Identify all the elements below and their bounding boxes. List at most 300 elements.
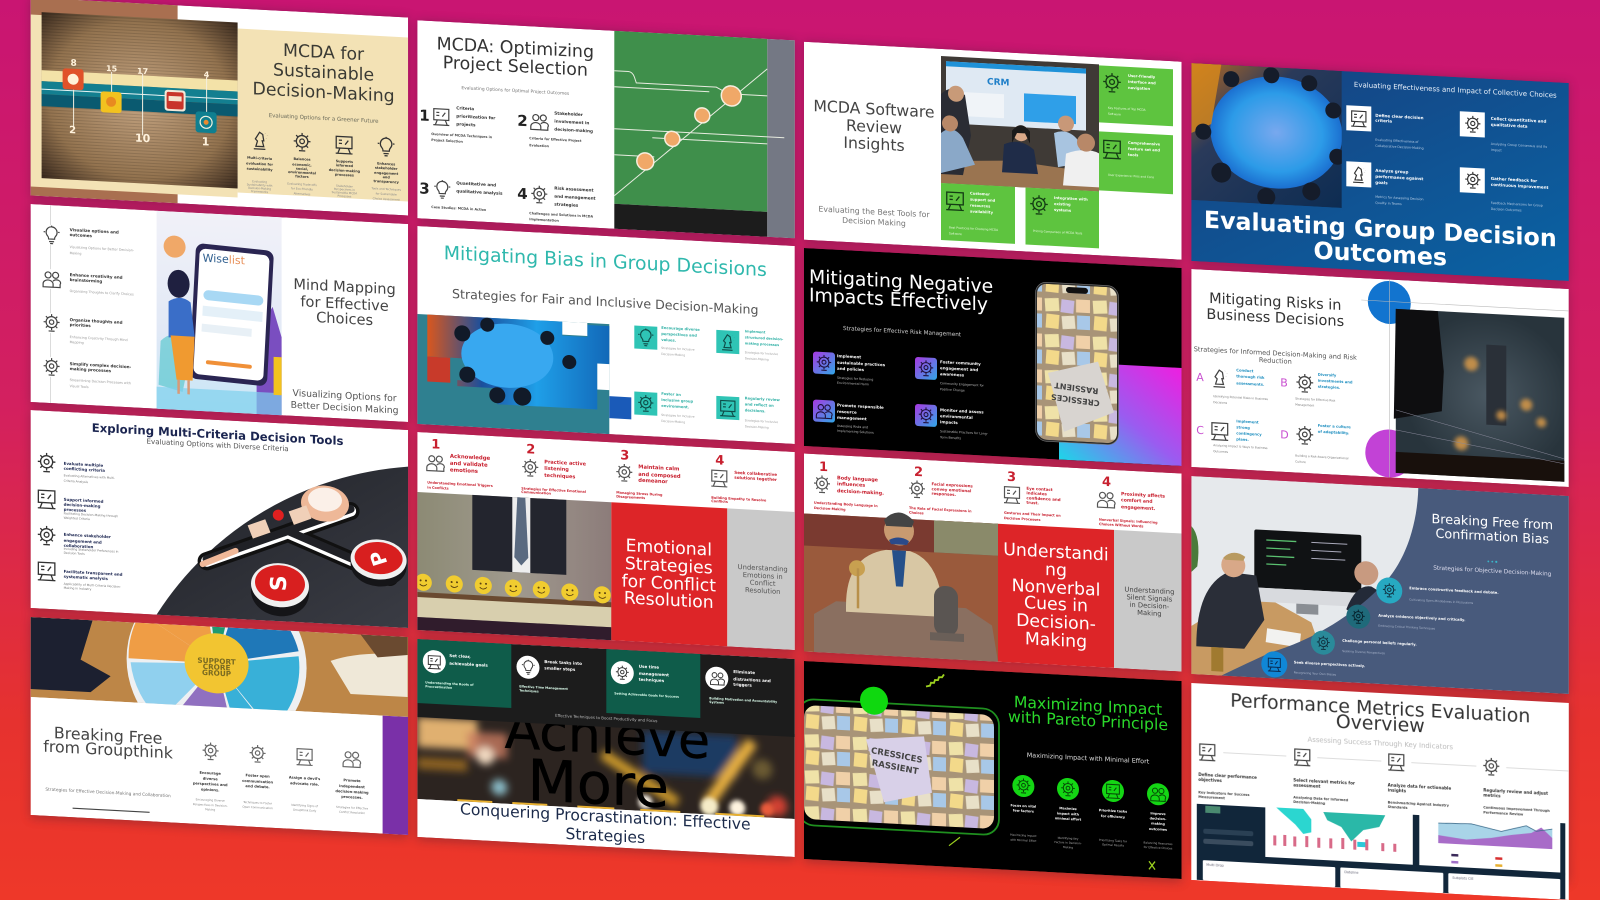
gradient block <box>1059 362 1182 466</box>
item: set goals <box>423 650 488 692</box>
photo: support wheel on floor: CRORE <box>203 661 230 672</box>
item 3: Eye contact <box>1026 485 1053 492</box>
photo: support wheel on floor: SUPPORT <box>197 655 236 666</box>
item: organize thoughts <box>42 313 128 347</box>
box: comprehensive feature set <box>1099 131 1173 194</box>
item: stakeholder engagement <box>370 136 401 202</box>
item: regularly review: decisions. <box>745 408 766 413</box>
item 3: trust. <box>1026 499 1039 505</box>
box: user-friendly interface: interface and <box>1128 80 1156 85</box>
item 1: Body language <box>837 475 879 483</box>
item: encourage diverse: Encourage diverse <box>661 326 700 332</box>
item: improve: making <box>1151 821 1165 826</box>
subtitle: Evaluating Effectiveness and Impact of Collective Choices <box>1354 81 1557 100</box>
item: collect data: Collect quantitative and <box>1491 115 1546 123</box>
item: break tasks: Techniques <box>519 688 539 693</box>
heading: Breaking Free <box>54 723 162 747</box>
item C: contingency <box>1236 431 1262 437</box>
heading: MCDA for <box>283 41 365 65</box>
heading: ng <box>1045 560 1067 581</box>
cross accent <box>1149 861 1155 870</box>
item: enhance stakeholder: engagement and <box>64 537 102 544</box>
box: integration: Pricing Comparison of MCDA Tools <box>1033 229 1083 235</box>
item: enhance creativity: Organizing Thoughts to Clarify Choices <box>70 289 134 296</box>
item 3: Maintain calm <box>638 464 679 472</box>
item: analyze performance: performance against <box>1375 173 1423 181</box>
item 2: Criteria for Effective Project <box>529 136 582 143</box>
item: gather feedback: Gather feedback for <box>1491 175 1537 183</box>
heading: Decision- <box>1016 611 1096 635</box>
item 1 <box>814 460 884 514</box>
item: regularly review <box>716 395 780 430</box>
item: evaluate conflicting criteria: Evaluating Alternatives with Multi- <box>64 473 115 480</box>
item: define objectives: Define clear performance <box>1198 771 1257 780</box>
item 1: 1 <box>431 437 440 453</box>
dashboard <box>1197 803 1565 899</box>
item: regularly review: Continuous Improvement Through <box>1483 805 1550 813</box>
item: eliminate distractions: Eliminate <box>733 669 755 675</box>
item: support informed: decision-making <box>64 501 101 508</box>
illustration: dark disc with buttons: S <box>267 575 292 592</box>
item 3: Decision Processes <box>1004 516 1041 522</box>
item: break tasks: smaller steps <box>544 665 576 672</box>
item: implement structured <box>716 328 784 362</box>
heading: Confirmation Bias <box>1435 526 1549 547</box>
item: sustainable practices <box>813 351 886 387</box>
item: gather feedback <box>1460 167 1549 214</box>
heading: MCDA Software <box>813 96 935 121</box>
item: balances factors: Evaluating Trade-offs <box>287 182 317 187</box>
item A <box>1196 366 1268 407</box>
item: evaluate conflicting criteria: conflicting criteria <box>64 465 105 472</box>
item 2: Communication <box>521 490 552 496</box>
item D: D <box>1280 428 1289 442</box>
box: user-friendly interface: User-friendly <box>1128 74 1156 79</box>
item: define objectives: objectives <box>1198 776 1222 783</box>
item 3: indicates <box>1026 490 1048 496</box>
item: improve <box>1144 782 1173 851</box>
item 2 <box>909 465 973 518</box>
item: simplify processes: making processes <box>70 366 112 373</box>
item: set goals: Procrastination <box>425 684 452 690</box>
item: supports processes <box>329 136 361 199</box>
phone with sticky notes: RASSIENT <box>1053 381 1099 396</box>
photo: wooden timeline: 1 <box>202 135 209 148</box>
item: select metrics: Analyzing Data for Informed <box>1293 795 1349 802</box>
item 2: listening <box>544 466 569 473</box>
item: define criteria: Evaluating Effectiveness of <box>1375 138 1419 144</box>
heading: Emotional <box>626 536 712 561</box>
item 2: Practice active <box>544 459 587 468</box>
box: customer support: Best Practices for Choosing MCDA <box>949 225 998 232</box>
connector lines <box>1223 753 1568 771</box>
item: improve: Balancing Resources <box>1144 840 1173 846</box>
chart: stacked area <box>1438 821 1552 870</box>
item: encourage perspectives: perspectives and <box>193 781 228 787</box>
subtitle: Conflict <box>750 579 776 588</box>
item: foster community: Foster community <box>940 359 981 366</box>
item: stakeholder engagement: Enhances <box>377 162 395 167</box>
item 2 <box>518 112 593 148</box>
grey side panel <box>1114 530 1182 672</box>
item B: B <box>1280 376 1288 390</box>
subtitle: Reduction <box>1259 356 1292 366</box>
heading: MCDA: Optimizing <box>437 34 594 63</box>
photo: bokeh lights with big words <box>417 696 795 828</box>
item 1 <box>427 437 493 493</box>
item: select metrics: assessment <box>1293 782 1321 788</box>
subtitle: Strategies for Informed Decision-Making and Risk <box>1194 345 1357 362</box>
item: analyze performance: Analyze group <box>1375 167 1408 174</box>
item: implement structured: making processes <box>745 341 779 347</box>
item: encourage perspectives: Encouraging Diverse <box>196 797 225 803</box>
filter cards <box>1203 860 1335 887</box>
item: stakeholder engagement: stakeholder <box>375 166 398 171</box>
photo: wooden timeline <box>42 12 238 188</box>
item: foster community: engagement and <box>940 365 978 372</box>
item: define criteria: Collaborative Decision-Making <box>1375 144 1424 150</box>
subtitle: in Decision- <box>1130 601 1170 611</box>
item: analyze evidence: Embracing Critical Thinking Techniques <box>1378 624 1436 631</box>
item: improve: Improve <box>1150 811 1166 816</box>
heading: Insights <box>843 132 905 155</box>
item: sustainable practices: Environmental Harm <box>837 381 869 386</box>
item: prioritize: for efficiency <box>1101 814 1126 819</box>
heading: with Pareto Principle <box>1008 706 1168 734</box>
item: enhance stakeholder <box>38 525 119 558</box>
item 4: Building Empathy to Resolve <box>711 496 767 503</box>
item: multi-criteria <box>246 132 273 194</box>
box: integration: Integration with <box>1054 196 1088 202</box>
item 4: Proximity affects <box>1121 491 1165 499</box>
item: balances factors: environmental <box>288 170 316 175</box>
item 2: Stakeholder <box>554 110 584 117</box>
box: customer support: Customer <box>970 191 990 197</box>
subtitle: Strategies for Effective Decision-Making and Collaboration <box>45 787 171 799</box>
photo: bokeh lights with big words: Achieve <box>505 701 710 772</box>
item D: Culture <box>1295 460 1306 464</box>
box: customer support <box>941 183 1015 244</box>
heading: Exploring Multi-Criteria Decision Tools <box>92 421 343 448</box>
item: independent decision-making: independent <box>339 784 365 789</box>
timeline rail <box>50 205 51 403</box>
item: independent decision-making: Strategies for Effective <box>336 805 368 811</box>
item: foster inclusive: Foster an <box>661 392 681 397</box>
box: integration: existing <box>1054 202 1071 207</box>
heading: Overview <box>1336 711 1425 737</box>
photo: wooden timeline: 10 <box>135 132 151 145</box>
item: eliminate distractions: triggers <box>733 681 752 687</box>
item: maximize: Making <box>1063 845 1073 850</box>
item 4: Seek collaborative <box>734 469 777 477</box>
photo: support wheel on floor <box>31 564 408 764</box>
item 2: decision-making <box>554 126 593 133</box>
item: collect data: Analyzing Group Consensus and Its <box>1491 142 1547 149</box>
heading: Conquering Procrastination: Effective <box>460 800 751 834</box>
item: foster community: awareness <box>940 371 965 377</box>
item: balances factors <box>287 132 317 197</box>
item 1: Decision-Making <box>814 506 846 512</box>
heading: Decision-Making <box>253 79 395 107</box>
item: enhance stakeholder: Including Stakeholder Preferences in <box>64 547 119 554</box>
item: regularly review: Regularly review and adjust <box>1483 787 1548 795</box>
item 2: Strategies for Effective Emotional <box>521 487 586 494</box>
item C: Analyzing Impact & Ways to Business <box>1213 443 1268 450</box>
item: monitor impacts: environmental <box>940 413 973 419</box>
item: regularly review <box>1483 757 1550 818</box>
photo: sticky notes wall: RASSIENT <box>871 758 919 777</box>
panel: slide MCDA Optimizing Project Selection <box>417 20 795 238</box>
item: maximize: Factors in Decision- <box>1054 840 1082 845</box>
subtitle: Strategies for Objective Decision-Making <box>1433 566 1552 578</box>
item: multi-criteria: Decision-Making <box>248 186 271 191</box>
item: devil's advocate: Assign a devil's <box>289 775 320 781</box>
item 4: Choices Without Words <box>1099 522 1143 528</box>
item: balances factors: factors <box>295 174 309 179</box>
item B: investments and <box>1318 379 1353 385</box>
item: supports processes: Processes <box>338 194 352 199</box>
item: prioritize <box>1099 779 1128 848</box>
item 4 <box>518 186 596 222</box>
box: customer support: support and <box>970 197 996 203</box>
item 1: Understanding Body Language in <box>814 501 878 508</box>
photo: round table from above <box>1191 63 1345 210</box>
item 4: 4 <box>517 185 528 203</box>
item C: strong <box>1236 425 1250 430</box>
item D: Foster a culture <box>1318 424 1351 429</box>
item: challenge beliefs: Seeking Diverse Perspectives <box>1342 649 1385 655</box>
box: customer support: availability <box>970 209 994 215</box>
item: implement structured: Decision-Making <box>745 356 769 362</box>
item 4: Challenges and Solutions in MCDA <box>529 211 593 219</box>
subtitle: Evaluating Options with Diverse Criteria <box>147 437 289 453</box>
heading: Breaking Free from <box>1431 512 1553 533</box>
subtitle: Strategies for Fair and Inclusive Decision-Making <box>452 286 759 317</box>
red title panel <box>998 524 1114 668</box>
item: responsible management: management <box>837 414 867 421</box>
item: devil's advocate: advocate role. <box>290 781 319 787</box>
item: stakeholder engagement: engagement <box>374 171 399 176</box>
underline <box>73 808 150 812</box>
photo: two men at monitor <box>1191 526 1389 684</box>
item: balances factors: Balances <box>293 157 311 162</box>
item B: Strategies for Effective Risk <box>1295 397 1336 403</box>
item: stakeholder engagement: Choice Assessment <box>373 196 401 202</box>
item C <box>1196 417 1268 456</box>
heading: Making <box>1025 629 1087 652</box>
item: maximize: Maximize <box>1059 806 1077 811</box>
item 3: 3 <box>620 448 629 464</box>
photo: CRM meeting <box>941 56 1099 191</box>
item: define objectives: Measurement <box>1198 795 1225 800</box>
item: analyze data: Benchmarking Against Industry <box>1388 800 1450 808</box>
item 1: decision-making. <box>837 488 884 497</box>
item: focus: few factors <box>1013 808 1034 814</box>
item 1: Acknowledge <box>450 454 491 462</box>
item: define objectives <box>1198 744 1257 802</box>
accent dots <box>1487 560 1497 563</box>
item: foster communication: Techniques to Foster <box>242 800 273 806</box>
heading: from Groupthink <box>43 736 174 762</box>
item: monitor impacts: Sustainable Practices for Long- <box>940 429 988 436</box>
item: implement structured: structured decision- <box>745 335 784 341</box>
item 1: Overview of MCDA Techniques in <box>431 132 493 139</box>
box: comprehensive feature set: User Experience: Pros and Cons <box>1108 173 1154 179</box>
item A: Conduct <box>1236 368 1254 373</box>
item: stakeholder engagement: and <box>383 175 390 180</box>
panel: slide Mitigating Negative Impacts Effectively <box>804 248 1182 466</box>
item: encourage perspectives: Making <box>205 807 215 812</box>
item 4: 4 <box>1102 475 1111 490</box>
item: implement structured: Strategies for Inclusive <box>745 350 778 356</box>
heading: Performance Metrics Evaluation <box>1230 689 1530 727</box>
item: regularly review: Strategies for Inclusive <box>745 418 778 424</box>
item: supports processes: Perspectives in <box>334 187 355 192</box>
item: analyze performance: Metrics for Assessing Decision <box>1375 195 1424 201</box>
panel: slide Mitigating Risks in Business Decisions <box>1191 269 1569 487</box>
item: simplify processes: Visual Tools <box>70 384 89 389</box>
item: enhance creativity: Enhance creativity and <box>70 272 123 279</box>
item: implement structured: Implement <box>745 329 766 334</box>
item: sustainable practices: sustainable practices <box>837 359 886 367</box>
item: sustainable practices: Implement <box>837 353 861 359</box>
item B: strategies. <box>1318 385 1341 390</box>
item: foster communication <box>242 744 274 810</box>
item: time management <box>611 661 679 699</box>
item: devil's advocate: Groupthink Early <box>293 808 317 813</box>
item: multi-criteria: Sustainability with <box>247 182 273 188</box>
item: balances factors: for Eco-Friendly <box>291 186 313 191</box>
item: collect data <box>1460 111 1547 155</box>
item 1: Understanding Emotional Triggers <box>427 481 493 488</box>
item: foster community <box>915 357 985 394</box>
item: select metrics: Select relevant metrics for <box>1293 777 1355 785</box>
item 2: The Role of Facial Expressions in <box>909 506 972 513</box>
item: define criteria <box>1346 105 1424 150</box>
item: eliminate distractions <box>705 666 777 708</box>
item B: Management <box>1295 403 1315 408</box>
item C: plans. <box>1236 437 1250 442</box>
subtitle: Emotions in <box>743 571 783 581</box>
item: encourage diverse: Decision-Making <box>661 352 685 357</box>
item: enhance creativity <box>42 269 134 296</box>
item 4 <box>1098 475 1165 530</box>
item 2: convey emotional <box>932 486 972 493</box>
subtitle: Evaluating Options for Optimal Project Outcomes <box>461 85 570 97</box>
item: responsible management: Assessing Risks and <box>837 424 868 429</box>
heading: Resolution <box>624 588 714 613</box>
item: eliminate distractions: Building Motivation and Accountability <box>709 696 777 704</box>
item 3 <box>1004 470 1061 523</box>
item: set goals: Set clear, <box>449 652 471 659</box>
photo: city at night <box>1394 309 1564 482</box>
item: select metrics <box>1293 749 1355 807</box>
photo: suit and smiley row <box>415 492 611 640</box>
item: independent decision-making: processes. <box>341 795 363 800</box>
green block two <box>606 649 700 718</box>
item: monitor impacts <box>915 404 988 442</box>
item 4: comfort and <box>1121 497 1153 504</box>
item: monitor impacts: Term Benefits <box>939 435 962 440</box>
item: supports processes: informed <box>336 163 354 168</box>
item: time management: techniques <box>639 676 665 683</box>
item: regularly review: Regularly review <box>745 396 780 402</box>
item: responsible management: resource <box>837 408 857 414</box>
illustration: woman with phone <box>157 211 282 415</box>
item 1: influences <box>837 481 865 489</box>
item: constructive feedback: Embrace constructive feedback and debate. <box>1409 586 1499 595</box>
item 3: qualitative analysis <box>456 188 503 195</box>
item: gather feedback: Decision Outcomes <box>1491 207 1522 213</box>
item: devil's advocate: Identifying Signs of <box>291 803 319 808</box>
photo: wooden timeline: 4 <box>204 70 210 79</box>
item: simplify processes: Simplify complex decision- <box>70 361 132 369</box>
item 3: Managing Stress During <box>616 491 663 497</box>
item: seek perspectives: Recognizing Your Own Biases <box>1294 670 1336 677</box>
item: evaluate conflicting criteria: Criteria Analysis <box>64 479 88 484</box>
panel: slide Exploring Multi-Criteria Decision Tools <box>31 410 408 628</box>
panel: slide MCDA Software Review Insights <box>804 42 1182 260</box>
subtitle: Better Decision Making <box>291 399 399 416</box>
item 3: Gestures and Their Impact on <box>1004 511 1061 518</box>
item: facilitate transparent: Facilitate transparent and <box>64 568 123 576</box>
item 4: Conflicts <box>711 499 728 504</box>
item 1: Criteria <box>456 105 474 111</box>
box: user-friendly interface: navigation <box>1128 86 1150 91</box>
item: maximize <box>1054 777 1082 850</box>
item: gather feedback: Feedback Mechanisms for Group <box>1491 201 1543 208</box>
item 3: 3 <box>1007 470 1016 485</box>
item 2: 2 <box>517 112 528 130</box>
item: focus <box>1010 774 1037 843</box>
item: multi-criteria: Frameworks <box>251 189 269 194</box>
heading: Outcomes <box>1314 236 1447 272</box>
item: facilitate transparent: Making in Industry <box>64 586 92 591</box>
item: focus: with Minimal Effort <box>1010 838 1037 843</box>
item 2: involvement in <box>554 118 589 125</box>
heading: Mitigating Bias in Group Decisions <box>444 242 767 281</box>
photo: wooden timeline: 8 <box>70 59 77 69</box>
item: enhance stakeholder: collaboration <box>64 542 93 549</box>
item: encourage perspectives: Perspectives in Decision- <box>193 802 228 808</box>
blue circle <box>1368 280 1411 325</box>
photo: mosaic meeting <box>417 314 631 435</box>
item: balances factors: economic, <box>292 162 312 167</box>
item: improve: outcomes <box>1149 827 1167 832</box>
phone with sticky notes: CRESSICES <box>1050 392 1100 408</box>
item: organize thoughts: priorities <box>70 322 91 328</box>
item: multi-criteria: evaluation for <box>246 161 273 167</box>
item: collect data: qualitative data <box>1491 121 1528 128</box>
panel: slide Conquering Procrastination <box>417 639 795 857</box>
item 2: responses. <box>932 490 956 497</box>
item: simplify processes: Streamlining Decision Processes with <box>70 378 131 385</box>
item: stakeholder engagement: for Sustainable <box>376 191 397 197</box>
item 1: projects <box>456 121 476 127</box>
item 2: 2 <box>526 442 535 458</box>
heading: Strategies <box>565 825 645 847</box>
subtitle: Visualizing Options for <box>293 387 397 404</box>
heading: Review <box>846 115 902 137</box>
item: multi-criteria: sustainability <box>247 167 273 172</box>
item A: A <box>1196 371 1204 384</box>
heading: Business Decisions <box>1206 307 1344 330</box>
item 1: and validate <box>450 461 488 469</box>
panel: slide Performance Metrics Evaluation Overview <box>1191 683 1569 900</box>
heading: Evaluating Group Decision <box>1204 206 1557 252</box>
item: responsible management <box>813 399 884 435</box>
item 3: demeanor <box>638 478 668 485</box>
